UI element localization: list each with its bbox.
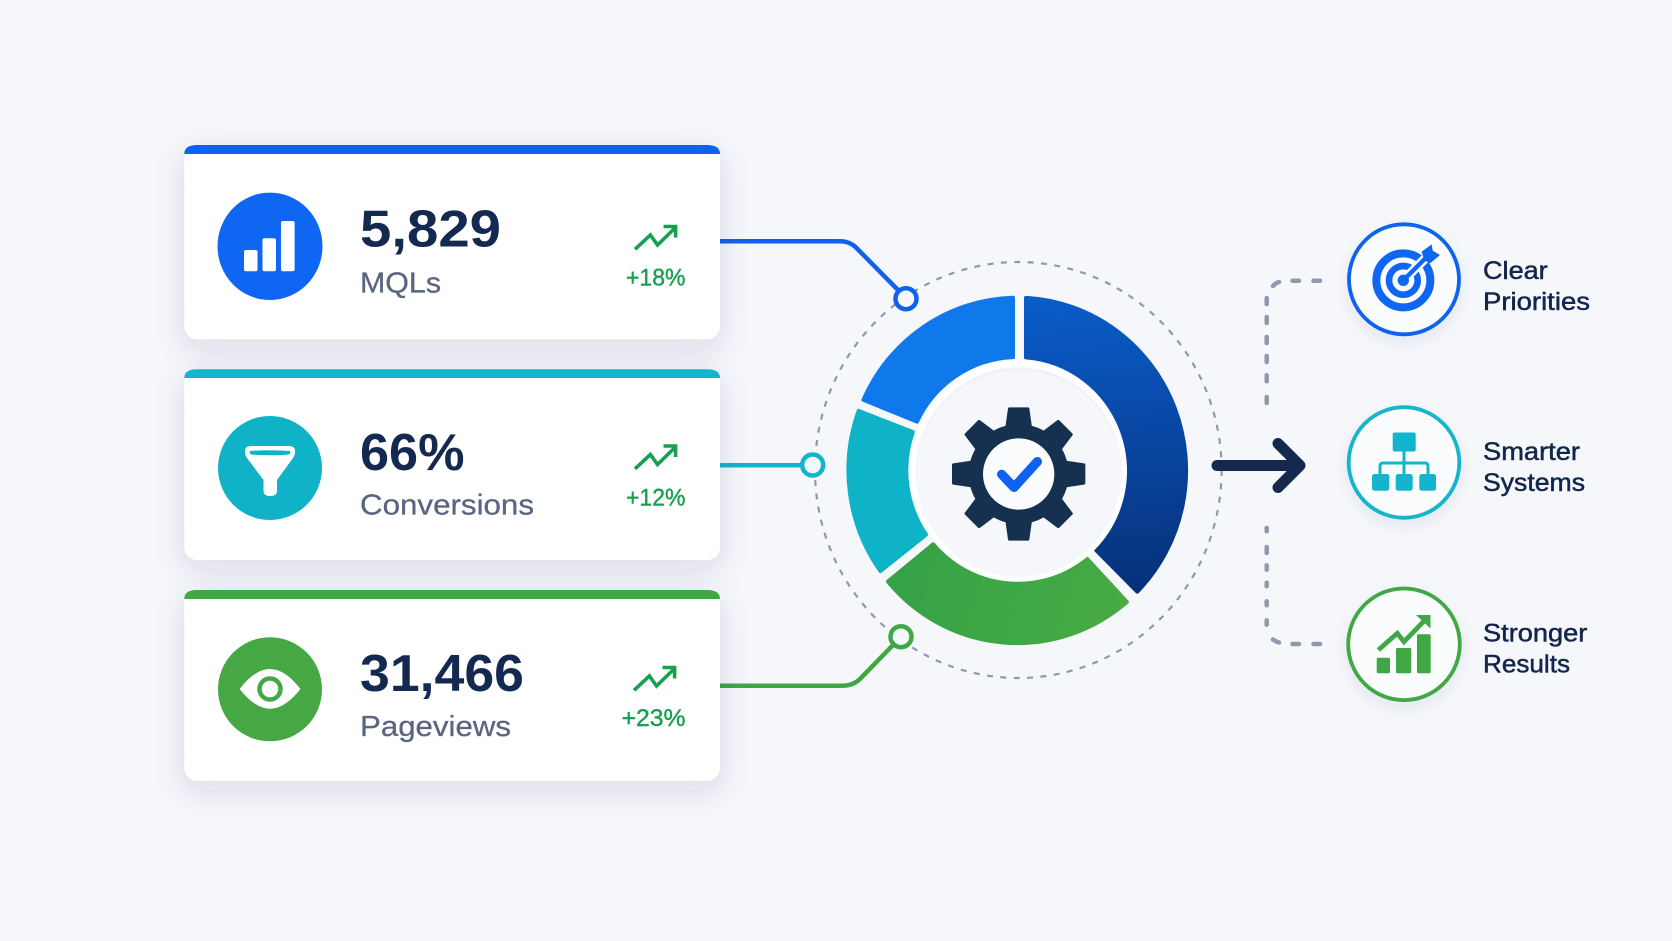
connector: MQLs to donut [720,241,916,309]
icon: bar chart [218,193,322,300]
label: Systems [1483,469,1585,497]
label: Smarter [1483,438,1580,466]
icon: gear with check [953,409,1084,539]
label: Stronger [1483,620,1587,648]
change percentage: +18% [626,265,686,292]
metric label: Pageviews [360,711,511,743]
label: Results [1483,651,1570,679]
icon: trend up [635,226,676,249]
arrow: donut to outcomes [1217,444,1300,488]
icon: growth bars [1377,615,1431,673]
dashed ring around donut [815,262,1222,678]
metric value: 31,466 [360,645,524,703]
icon: eye [218,637,322,741]
change percentage: +12% [626,485,686,512]
center disc [910,360,1127,582]
outcome: Stronger Results [1348,588,1587,700]
outcome: Smarter Systems [1349,407,1585,518]
icon: target [1376,244,1440,307]
icon: trend up [635,446,676,469]
outcome: Clear Priorities [1349,224,1590,334]
panel: MQLs card [184,145,720,339]
icon: org chart [1372,432,1436,491]
metric value: 66% [360,424,464,482]
metric label: Conversions [360,489,534,521]
segment: light blue [863,298,1013,422]
label: Clear [1483,257,1548,285]
panel: Pageviews card [184,590,720,781]
segment: teal [848,411,926,571]
donut chart [848,298,1186,643]
segment: dark blue [1026,298,1186,592]
segment: green [888,544,1127,643]
icon: funnel [218,416,322,520]
metric label: MQLs [360,267,441,299]
connector: Pageviews to donut [720,626,912,686]
dashed connector: lower [1267,528,1320,644]
panel: Conversions card [184,369,720,560]
icon: trend up [634,668,675,690]
connector: Conversions to donut [720,454,823,476]
dashed connector: upper [1267,281,1320,403]
label: Priorities [1483,288,1590,316]
change percentage: +23% [622,705,686,732]
metric value: 5,829 [360,201,501,259]
